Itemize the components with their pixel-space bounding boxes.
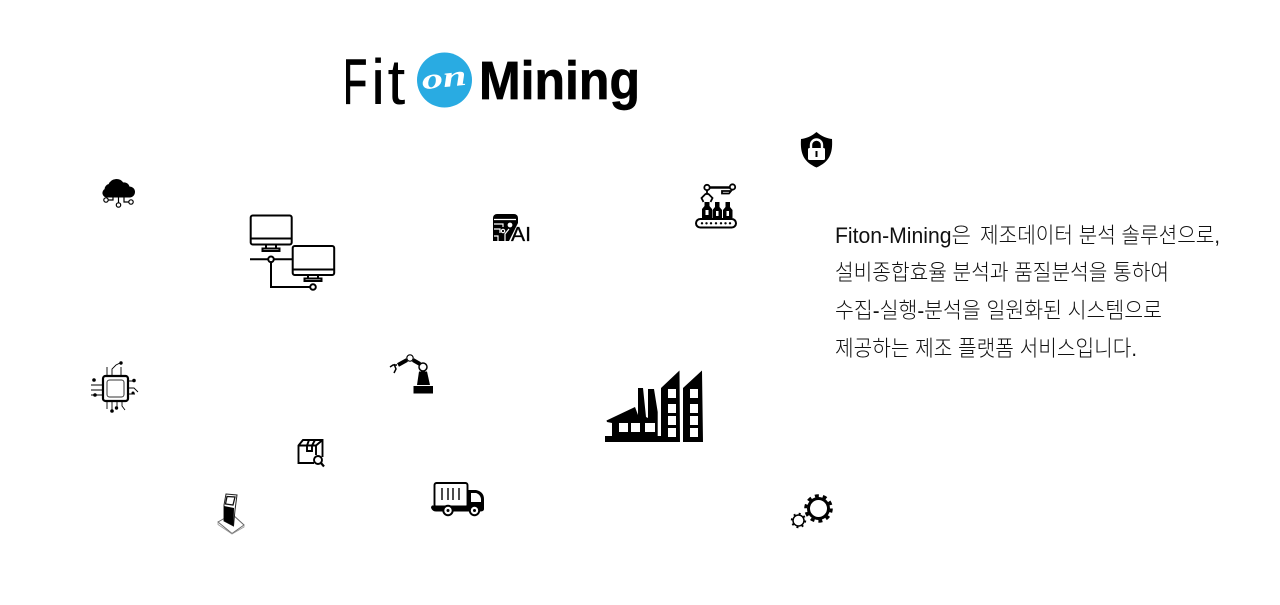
line 4: 제공하는 제조 플랫폼 서비스입니다. xyxy=(835,336,1137,361)
line 1: Fiton-Mining은 xyxy=(835,223,971,248)
icon: security shield xyxy=(801,132,832,168)
line 3: 수집-실행-분석을 일원화된 시스템으로 xyxy=(835,298,1162,323)
line 1 xyxy=(835,223,1220,248)
logo text: Fit: F xyxy=(343,48,367,118)
icon: connected monitors xyxy=(250,216,334,290)
icon: AI circuit xyxy=(493,214,531,246)
description text xyxy=(835,223,1220,361)
logo text: Mining: Mining xyxy=(479,51,640,111)
logo: Fit on Mining xyxy=(343,46,640,118)
AI label: AI xyxy=(511,224,531,246)
icon: kiosk xyxy=(218,494,244,534)
logo text: Fit: i xyxy=(371,46,385,118)
logo text: Fit xyxy=(343,46,406,118)
logo text: Fit: t xyxy=(388,46,406,118)
line 2: 설비종합효율 분석과 품질분석을 통하여 xyxy=(835,260,1169,285)
icon: microchip xyxy=(91,361,138,413)
icon: delivery truck xyxy=(431,483,484,515)
icon: cloud network xyxy=(103,180,135,207)
icon: factory xyxy=(605,370,703,442)
icon: gears xyxy=(792,496,831,527)
logo circle with on: on xyxy=(420,60,468,96)
line 1: 제조데이터 분석 솔루션으로, xyxy=(980,223,1220,248)
logo circle with on xyxy=(417,52,472,108)
icon: package inspection xyxy=(298,440,324,466)
icon: robot arm xyxy=(390,355,433,394)
icon: bottling robot conveyor xyxy=(696,184,736,228)
